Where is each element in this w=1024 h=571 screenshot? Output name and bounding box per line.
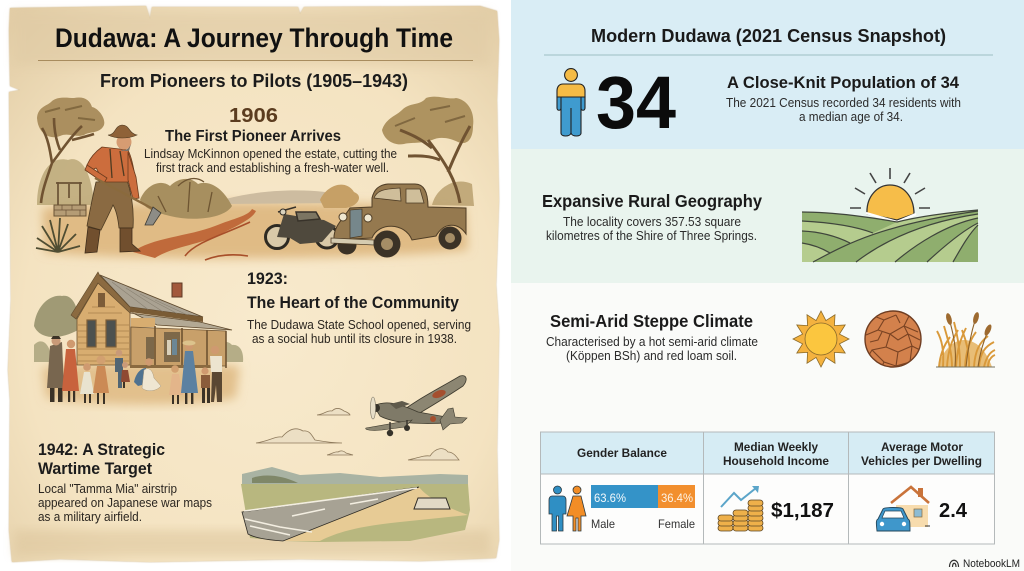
icon: male and female figures xyxy=(549,486,586,531)
column heading: gender balance: Gender Balance xyxy=(577,446,667,460)
text: climate description: (Köppen BSh) and red loam soil. xyxy=(566,349,737,363)
icon: sun over fields xyxy=(802,168,978,262)
table: key statistics xyxy=(540,432,994,544)
text: pioneer description: Lindsay McKinnon opened the estate, cutting the xyxy=(144,147,397,161)
illustration: schoolhouse and families xyxy=(34,272,243,405)
illustration: airstrip xyxy=(241,467,470,542)
mid bushes xyxy=(140,179,232,219)
building xyxy=(71,272,232,368)
heading: climate: Semi-Arid Steppe Climate xyxy=(550,311,753,331)
clouds xyxy=(256,408,459,460)
illustration: warplane xyxy=(366,376,467,436)
stat: median income: $1,187 xyxy=(771,500,834,522)
figure: pioneer with hoe xyxy=(85,125,161,253)
group of families xyxy=(47,336,222,404)
column heading: vehicles: Vehicles per Dwelling xyxy=(861,454,982,468)
heading: heart of the community: The Heart of the Community xyxy=(247,294,460,312)
heading: wartime target: 1942: A Strategic xyxy=(38,441,165,459)
heading: wartime target: Wartime Target xyxy=(38,460,152,478)
icon: house and car xyxy=(876,487,930,531)
heading: population: A Close-Knit Population of 34 xyxy=(727,73,960,92)
left tree xyxy=(37,97,104,137)
text: airstrip description: as a military airfield. xyxy=(38,510,142,524)
left background bush xyxy=(37,159,94,205)
text: geography description: kilometres of the Shire of Three Springs. xyxy=(546,229,757,243)
chart: gender split bar: Male xyxy=(591,517,615,531)
icon: person xyxy=(557,69,585,136)
icon: spiky sun xyxy=(793,311,849,367)
stat: vehicles per dwelling: 2.4 xyxy=(939,500,968,522)
column heading: median income: Household Income xyxy=(723,454,829,468)
chart: gender split bar: 63.6% xyxy=(594,491,626,505)
background trees and fence xyxy=(34,341,243,362)
agave plant xyxy=(36,218,80,252)
table header row xyxy=(540,432,994,474)
stat: population count: 34 xyxy=(596,61,676,144)
text: geography description: The locality covers 357.53 square xyxy=(563,215,741,229)
heading: geography: Expansive Rural Geography xyxy=(542,191,762,211)
subtitle: era range: From Pioneers to Pilots (1905–1943) xyxy=(100,71,408,91)
chart: gender split bar xyxy=(591,485,695,531)
panel: geography xyxy=(511,149,1024,283)
text: school description: The Dudawa State School opened, serving xyxy=(247,318,471,332)
date: 1906: 1906 xyxy=(229,105,278,127)
dirt track xyxy=(133,209,256,258)
right tree xyxy=(382,97,473,144)
illustration: vintage pickup truck xyxy=(331,184,466,258)
column heading: vehicles: Average Motor xyxy=(881,440,963,454)
illustration: pioneer scene xyxy=(36,97,474,260)
text: climate description: Characterised by a hot semi-arid climate xyxy=(546,335,758,349)
text: airstrip description: Local "Tamma Mia" airstrip xyxy=(38,482,177,496)
title: Dudawa: A Journey Through Time xyxy=(55,23,453,53)
column heading: median income: Median Weekly xyxy=(734,440,818,454)
panel: climate and statistics xyxy=(511,283,1024,571)
illustration: motorcycle xyxy=(266,207,338,248)
year: 1923: 1923: xyxy=(247,270,288,288)
heading: first pioneer: The First Pioneer Arrives xyxy=(165,128,341,145)
panel: population xyxy=(511,0,1024,149)
text: population description: The 2021 Census recorded 34 residents with xyxy=(726,96,961,110)
chart: gender split bar: 36.4% xyxy=(661,491,693,505)
icon: dry reeds xyxy=(936,312,995,367)
icon: cracked red soil xyxy=(865,311,921,370)
right background bush xyxy=(432,181,474,206)
panel: history parchment xyxy=(8,6,499,562)
heading: modern dudawa: Modern Dudawa (2021 Census Snapshot) xyxy=(591,25,946,46)
text: school description: as a social hub until its closure in 1938. xyxy=(252,332,457,346)
text: pioneer description: first track and establishing a fresh-water well. xyxy=(156,161,389,175)
icon: coins and rising arrow xyxy=(718,486,763,531)
icon: stone well xyxy=(54,182,86,216)
chart: gender split bar: Female xyxy=(658,517,695,531)
text: population description: a median age of 34. xyxy=(799,110,903,124)
tree behind house xyxy=(34,296,78,337)
text: airstrip description: appeared on Japanese war maps xyxy=(38,496,212,510)
logo: NotebookLM: NotebookLM xyxy=(963,558,1020,570)
